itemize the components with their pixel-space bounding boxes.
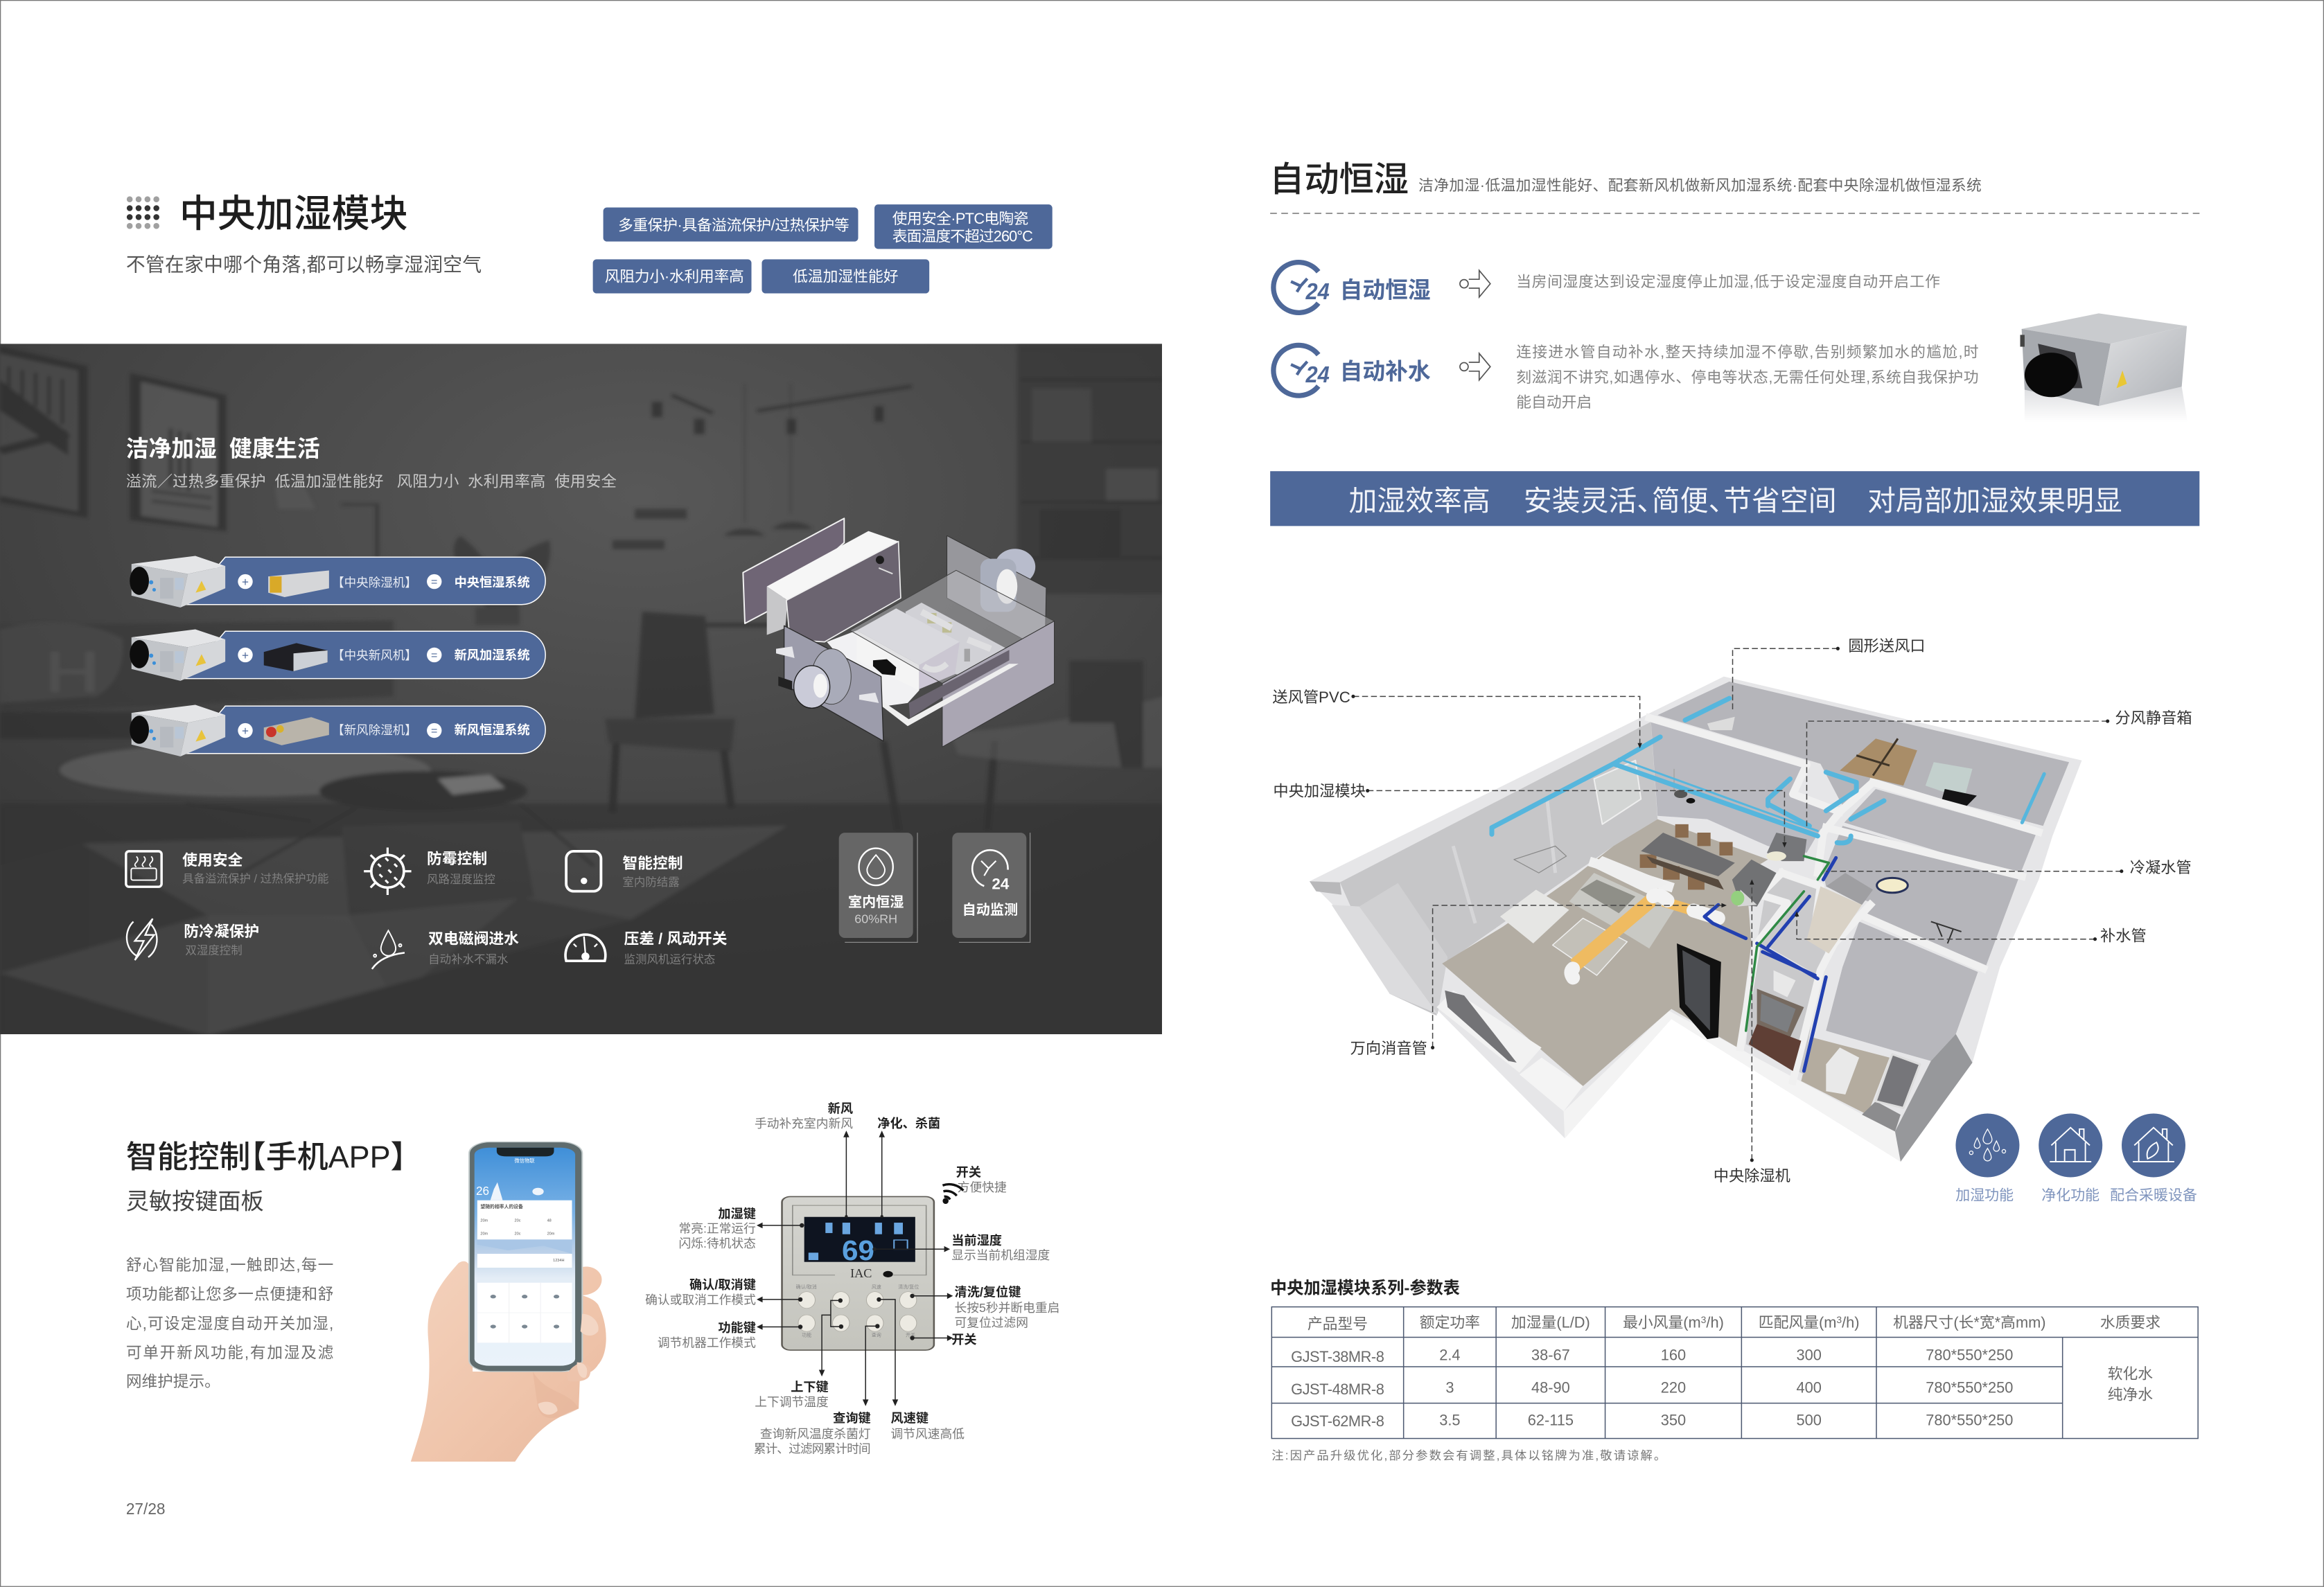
phone body: 26: [476, 1185, 489, 1198]
feature: safe use: [126, 851, 328, 887]
paragraph: smart control: 项功能都让您多一点便捷和舒: [126, 1285, 333, 1303]
dining set: [1640, 824, 1733, 889]
callout: current humidity: [951, 1234, 1050, 1262]
right shelf: [1017, 344, 1164, 594]
panel button captions: 查询: [872, 1331, 881, 1338]
panel heading: 洁净加湿 健康生活: [126, 436, 320, 461]
feature: auto constant humidity: 自动恒湿: [1340, 277, 1431, 303]
feature: safe use: 具备溢流保护 / 过热保护功能: [182, 873, 328, 885]
feature: auto constant humidity: 当房间湿度达到设定湿度停止加湿,低于设定湿度自动开启工作: [1516, 273, 1940, 290]
leader: round air outlet: [1733, 637, 1926, 711]
phone body: 20m: [480, 1232, 488, 1236]
banner: 加湿效率高: [1349, 485, 1490, 517]
tv and door: [1436, 991, 1542, 1073]
row: GJST-48MR-8: GJST-48MR-8: [1291, 1381, 1384, 1398]
icon: lightning: [127, 919, 157, 960]
combination row 3: +: [242, 725, 249, 738]
icon: water drop: [372, 930, 405, 969]
frames: [0, 346, 87, 518]
table header: 加湿量(L/D): [1511, 1314, 1590, 1331]
header: central humidifier module: [126, 192, 482, 275]
row: GJST-48MR-8: 3: [1445, 1379, 1454, 1397]
feature: dual solenoid valve: [372, 930, 519, 969]
panel button captions: 清洗/复位: [898, 1284, 919, 1290]
icon: wifi: [942, 1185, 963, 1203]
icon: gauge: [565, 934, 606, 961]
combination row 1: 【中央除湿机】: [332, 576, 417, 589]
card: auto monitoring: [952, 833, 1030, 942]
leader: air supply pipe: 送风管PVC: [1272, 689, 1350, 706]
room walls: [1340, 722, 1657, 1016]
hanging lights and shelves: [724, 522, 813, 535]
floor plan leaders: [1272, 637, 2192, 1185]
callout: reset key: 可复位过滤网: [955, 1315, 1028, 1329]
icon: rounded panel: [566, 851, 601, 892]
combination row 3: 新风恒湿系统: [455, 722, 530, 737]
subtitle: 不管在家中哪个角落,都可以畅享湿润空气: [126, 254, 482, 275]
badge: purify: [2039, 1113, 2102, 1204]
panel subheading: 溢流／过热多重保护 低温加湿性能好 风阻力小 水利用率高 使用安全: [126, 473, 617, 490]
callout: humidify key: 加湿键: [718, 1207, 756, 1221]
exploded view of humidifier module: [743, 518, 1055, 747]
table header: /h): [1706, 1314, 1724, 1331]
panel brand: IAC: [850, 1266, 872, 1280]
leader: silencer duct: 万向消音管: [1350, 1040, 1427, 1057]
callout: confirm key: [645, 1278, 756, 1306]
panel button captions: 开关: [906, 1331, 915, 1338]
callout: humidify key: 常亮:正常运行: [678, 1222, 756, 1236]
callout: fan speed key: 风速键: [891, 1411, 928, 1425]
leader: water supply pipe: 补水管: [2100, 927, 2147, 944]
feature: auto refill: [1274, 344, 1979, 411]
tag: low resistance: [593, 259, 751, 294]
row: GJST-38MR-8: 2.4: [1439, 1347, 1461, 1364]
icon: 24h clock: [1274, 345, 1330, 396]
leader: water supply pipe: [1795, 911, 2147, 944]
callout: fresh air: 新风: [828, 1101, 853, 1115]
row: GJST-48MR-8: 48-90: [1531, 1379, 1570, 1397]
table header: /h): [1842, 1314, 1860, 1331]
feature: anti-condensation: [127, 919, 259, 960]
leader: humidifier module: 中央加湿模块: [1273, 783, 1366, 800]
badge: heating equipment: 配合采暖设备: [2110, 1188, 2197, 1204]
badge: heating equipment: [2110, 1113, 2197, 1204]
callout: purify: 净化、杀菌: [877, 1116, 940, 1131]
feature: mould control: 防霉控制: [427, 850, 487, 867]
callout: function key: 调节机器工作模式: [658, 1336, 756, 1349]
feature: auto refill: 刻滋润不讲究,如遇停水、停电等状态,无需任何处理,系统自我保护功: [1516, 369, 1979, 386]
combination row 2: =: [431, 649, 437, 662]
feature: anti-condensation: 防冷凝保护: [184, 923, 259, 940]
icon: dot grid: [127, 196, 159, 229]
water quality cell: [2108, 1365, 2153, 1403]
leader: air supply pipe: [1272, 689, 1642, 748]
callout: confirm key: 确认或取消工作模式: [645, 1293, 756, 1306]
leader: condensate pipe: [1826, 859, 2192, 876]
phone body: 48: [547, 1218, 552, 1223]
icon: mould: [364, 848, 412, 895]
table header: 产品型号: [1308, 1315, 1368, 1333]
leader: silencer box: [1806, 709, 2192, 827]
callout: query key: 查询新风温度杀菌灯: [760, 1427, 871, 1441]
tag: safe: 表面温度不超过260°C: [892, 228, 1033, 245]
panel button captions: 确认/取消: [796, 1284, 817, 1290]
feature: smart control: 智能控制: [622, 854, 683, 871]
floors: [1442, 819, 1768, 1086]
phone body: [469, 1142, 582, 1372]
combination row 3: [130, 705, 545, 756]
subheading: sensitive panel: 灵敏按键面板: [126, 1189, 264, 1214]
table header: 匹配风量(m: [1759, 1314, 1836, 1331]
tag: safe: 使用安全·PTC电陶瓷: [892, 210, 1028, 227]
feature: anti-condensation: 双湿度控制: [185, 945, 243, 957]
chairs: [635, 612, 714, 719]
phone body: 微信物联: [515, 1158, 535, 1164]
card: indoor constant humidity: 60%RH: [854, 912, 897, 926]
paragraph: smart control: 舒心智能加湿,一触即达,每一: [126, 1256, 333, 1274]
phone body: 20c: [515, 1232, 521, 1236]
callout: confirm key: 确认/取消键: [689, 1278, 756, 1292]
icon: 24h clock: [972, 850, 1008, 886]
table header: 最小风量(m: [1623, 1314, 1701, 1331]
row: GJST-48MR-8: 400: [1796, 1379, 1822, 1397]
callout: switch: 开关: [951, 1333, 977, 1347]
callout: fresh air: [755, 1101, 853, 1131]
table heading: 中央加湿模块系列-参数表: [1270, 1278, 1460, 1297]
combination row 1: +: [242, 576, 249, 589]
air duct pipes: [1492, 698, 2044, 843]
header: auto constant humidity: 自动恒湿: [1269, 160, 1409, 199]
central units: [1767, 833, 1806, 861]
callout: up down key: 上下调节温度: [755, 1395, 829, 1409]
heading: smart control app: 智能控制【手机APP】: [126, 1140, 421, 1175]
table note: 注:因产品升级优化,部分参数会有调整,具体以铭牌为准,敬请谅解。: [1271, 1448, 1666, 1462]
feature: smart control: 室内防结露: [622, 876, 680, 889]
panel: dark room background: [0, 344, 1164, 1036]
paragraph: smart control: [126, 1256, 333, 1390]
outer shell: [1310, 677, 2081, 1162]
feature: dual solenoid valve: 自动补水不漏水: [428, 953, 509, 966]
callout: current humidity: 当前湿度: [951, 1234, 1002, 1248]
parameter table: [1271, 1307, 2198, 1439]
fingers: [567, 1363, 590, 1381]
table header: 3: [1836, 1314, 1842, 1325]
callout: fan speed key: 调节风速高低: [891, 1427, 965, 1441]
banner: 对局部加湿效果明显: [1867, 485, 2122, 517]
callout: power: 开关: [956, 1165, 981, 1179]
feature: dual solenoid valve: 双电磁阀进水: [428, 930, 519, 948]
combination row 1: =: [431, 576, 437, 588]
feature: safe use: 使用安全: [182, 851, 243, 869]
leader: central dehumidifier: [1714, 880, 1790, 1185]
paragraph: smart control: 可单开新风功能,有加湿及滤: [126, 1343, 333, 1361]
combination row 2: 新风加湿系统: [455, 648, 530, 662]
badge: purify: 净化功能: [2041, 1188, 2099, 1204]
callout: reset key: [955, 1285, 1059, 1329]
icon: drop in circle: [859, 849, 893, 885]
row: GJST-38MR-8: [1291, 1347, 2013, 1365]
callout: query key: 查询键: [833, 1411, 871, 1425]
tag: low resistance: 风阻力小·水利用率高: [605, 267, 744, 285]
callout: humidify key: [678, 1207, 756, 1250]
hand: [411, 1261, 606, 1462]
row: GJST-62MR-8: 62-115: [1528, 1412, 1574, 1429]
icon: 24h clock: [1274, 263, 1330, 312]
panel button captions: 功能: [802, 1331, 811, 1338]
badge: humidify: [1955, 1113, 2019, 1204]
callout: up down key: [755, 1381, 829, 1409]
header: auto constant humidity: 洁净加湿·低温加湿性能好、配套新风机做新风加湿系统·配套中央除湿机做恒湿系统: [1418, 177, 1982, 194]
panel button captions: [796, 1284, 919, 1338]
phone in hand: [411, 1142, 606, 1462]
lcd display: [804, 1217, 915, 1262]
table: [60, 743, 430, 797]
feature: auto constant humidity: [1274, 263, 1940, 312]
feature: auto refill: 能自动开启: [1516, 393, 1592, 411]
back wall plants and lamps: [342, 504, 377, 558]
combination row 1: [130, 556, 545, 608]
buttons: [798, 1292, 917, 1331]
table header: 3: [1701, 1314, 1707, 1325]
callout: power: 方便快捷: [958, 1180, 1007, 1194]
row: GJST-38MR-8: 38-67: [1531, 1347, 1570, 1364]
callout: reset key: 清洗/复位键: [955, 1285, 1021, 1300]
combination row 3: =: [431, 725, 437, 737]
panel callout arrows: [757, 1131, 953, 1406]
combination row 3: 【新风除湿机】: [332, 723, 417, 737]
row: GJST-62MR-8: GJST-62MR-8: [1291, 1412, 1384, 1430]
feature: smart control: [566, 851, 683, 892]
leader: humidifier module: [1273, 783, 1787, 848]
feature: pressure switch: 监测风机运行状态: [624, 953, 715, 966]
combination row 2: 【中央新风机】: [332, 648, 417, 662]
card: indoor constant humidity: 室内恒湿: [848, 894, 904, 910]
callout: up down key: 上下键: [791, 1381, 829, 1394]
feature: pressure switch: [565, 930, 728, 966]
phone body: 20m: [480, 1218, 488, 1223]
phone body: 望随的相率人的设备: [480, 1203, 523, 1209]
panel callout labels: [645, 1101, 1059, 1455]
phone body: 20c: [515, 1218, 521, 1223]
tag: safe: [874, 204, 1053, 249]
phone body: 1234H: [553, 1259, 564, 1263]
page number: 27/28: [126, 1500, 166, 1518]
tag: multiple protection: 多重保护·具备溢流保护/过热保护等: [618, 217, 850, 234]
row: GJST-62MR-8: 3.5: [1439, 1412, 1461, 1429]
combination row 1: 中央恒湿系统: [455, 575, 530, 589]
row: GJST-48MR-8: [1291, 1379, 2013, 1398]
icon: heater: [126, 851, 161, 887]
table header: 水质要求: [2100, 1314, 2160, 1331]
tag: low temperature: [762, 259, 929, 294]
bedroom and bath furniture: [1757, 988, 1804, 1038]
leader: condensate pipe: 冷凝水管: [2130, 859, 2192, 876]
leader: round air outlet: 圆形送风口: [1848, 637, 1926, 655]
callout: humidify key: 闪烁:待机状态: [678, 1236, 756, 1250]
callout: reset key: 长按5秒并断电重启: [955, 1301, 1059, 1315]
row: GJST-62MR-8: [1291, 1412, 2013, 1430]
water quality cell: 软化水: [2108, 1365, 2153, 1382]
banner: [1270, 471, 2199, 526]
combination row 2: +: [242, 649, 249, 662]
tag: multiple protection: [604, 207, 859, 242]
silencer duct: [1571, 895, 1718, 977]
table header: 机器尺寸(长*宽*高mm): [1893, 1314, 2046, 1331]
card: indoor constant humidity: [839, 833, 917, 942]
paragraph: smart control: 网维护提示。: [126, 1372, 220, 1390]
leader: silencer box: 分风静音箱: [2115, 709, 2192, 727]
tag: low temperature: 低温加湿性能好: [793, 267, 899, 285]
feature: auto refill: 连接进水管自动补水,整天持续加湿不停歇,告别频繁加水的尴尬,时: [1516, 344, 1979, 361]
table header: 额定功率: [1420, 1314, 1480, 1331]
function badges: [1955, 1113, 2197, 1204]
feature: pressure switch: 压差 / 风动开关: [624, 930, 728, 948]
lcd humidity reading: 69: [842, 1234, 874, 1266]
banner: 安装灵活、简便、节省空间: [1524, 485, 1837, 517]
interior wall tops: [1594, 718, 2039, 1081]
row: GJST-48MR-8: 780*550*250: [1926, 1379, 2013, 1397]
row: GJST-48MR-8: 220: [1661, 1379, 1686, 1397]
panel button captions: 风速: [872, 1284, 881, 1290]
product photo: [2020, 313, 2187, 423]
table header: [1308, 1314, 2160, 1333]
callout: current humidity: 显示当前机组湿度: [951, 1248, 1050, 1262]
row: GJST-38MR-8: 300: [1796, 1347, 1822, 1364]
callout: function key: [658, 1321, 756, 1349]
title: 中央加湿模块: [179, 192, 408, 235]
windows and shelves: [1594, 761, 1641, 824]
feature: mould control: 风路湿度监控: [427, 874, 495, 886]
icon: arrow: [1460, 353, 1490, 380]
leader: central dehumidifier: 中央除湿机: [1714, 1167, 1790, 1185]
floor plan: [1310, 677, 2081, 1162]
callout: fan speed key: [891, 1411, 965, 1441]
outer right wall: [1895, 1034, 1973, 1162]
water pipes: [1705, 858, 1836, 1071]
callout: fresh air: 手动补充室内新风: [755, 1117, 853, 1131]
water quality cell: 纯净水: [2108, 1385, 2153, 1403]
combination row 2: [130, 629, 545, 681]
row: GJST-62MR-8: 780*550*250: [1926, 1412, 2013, 1429]
callout: function key: 功能键: [718, 1321, 756, 1335]
badge: humidify: 加湿功能: [1955, 1188, 2014, 1204]
feature tags: [593, 204, 1053, 294]
card: auto monitoring: 24: [992, 875, 1010, 892]
callout: power: [956, 1165, 1007, 1194]
card: auto monitoring: 自动监测: [962, 902, 1018, 918]
header: auto constant humidity: [1269, 160, 1982, 199]
callout: query key: 累计、过滤网累计时间: [754, 1442, 871, 1455]
sofa and armchair: [1591, 856, 1669, 893]
row: GJST-62MR-8: 500: [1796, 1412, 1822, 1429]
feature: auto refill: 自动补水: [1340, 359, 1431, 384]
callout: query key: [754, 1411, 871, 1455]
row: GJST-62MR-8: 350: [1661, 1412, 1686, 1429]
feature: mould control: [364, 848, 495, 895]
row: GJST-38MR-8: 160: [1661, 1347, 1686, 1364]
phone body: 20m: [547, 1232, 555, 1236]
leader: silencer duct: [1350, 903, 1727, 1057]
row: GJST-38MR-8: 780*550*250: [1926, 1347, 2013, 1364]
row: GJST-38MR-8: GJST-38MR-8: [1291, 1348, 1384, 1365]
icon: arrow: [1460, 270, 1490, 297]
paragraph: smart control: 心,可设定湿度自动开关加湿,: [126, 1315, 333, 1333]
control panel: [782, 1196, 934, 1350]
floor: [63, 804, 1160, 930]
